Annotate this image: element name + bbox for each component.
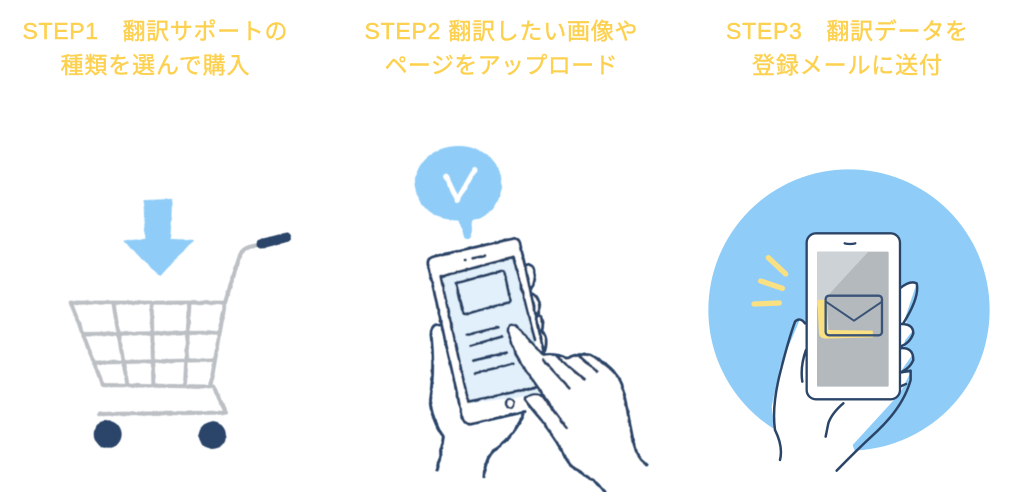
step 1 heading: 種類を選んで購入 <box>60 52 250 78</box>
step 3 heading: STEP3 翻訳データを <box>726 18 968 44</box>
phone body <box>807 233 900 399</box>
icon: hands holding phone with speech bubble <box>415 146 647 492</box>
icon: envelope <box>826 296 882 335</box>
icon: hand holding phone on blue circle <box>708 169 990 471</box>
step 1 heading <box>22 18 288 78</box>
cart wheel right <box>199 422 226 449</box>
left hand <box>430 325 443 470</box>
step 3 heading <box>726 18 968 78</box>
phone screen <box>441 257 548 403</box>
speech bubble <box>415 146 502 239</box>
icon: down arrow <box>124 199 193 276</box>
screen image box <box>456 271 510 314</box>
step 3 heading: 登録メールに送付 <box>752 52 942 78</box>
blue circle <box>708 169 990 451</box>
phone screen <box>817 252 889 387</box>
hand outline <box>774 282 917 471</box>
yellow envelope shadow <box>817 299 873 339</box>
yellow sparkle marks <box>754 258 786 304</box>
cart handle <box>261 237 287 244</box>
right hand <box>508 325 647 480</box>
check mark <box>446 169 475 200</box>
phone speaker <box>845 240 855 247</box>
step 1 heading: STEP1 翻訳サポートの <box>22 18 288 44</box>
step 2 heading: ページをアップロード <box>384 52 618 78</box>
screen text lines <box>467 327 513 373</box>
cart frame <box>71 245 258 414</box>
phone body <box>428 239 550 424</box>
screen highlight <box>817 252 868 307</box>
fingers behind phone <box>527 264 546 350</box>
step 2 heading: STEP2 翻訳したい画像や <box>364 18 638 44</box>
phone speaker <box>465 256 485 260</box>
icon: shopping cart with arrow <box>71 199 287 449</box>
cart wheel left <box>94 420 122 448</box>
home button <box>506 399 514 408</box>
left hand lower palm <box>484 413 523 477</box>
step 2 heading <box>364 18 638 78</box>
white hand <box>772 319 907 457</box>
